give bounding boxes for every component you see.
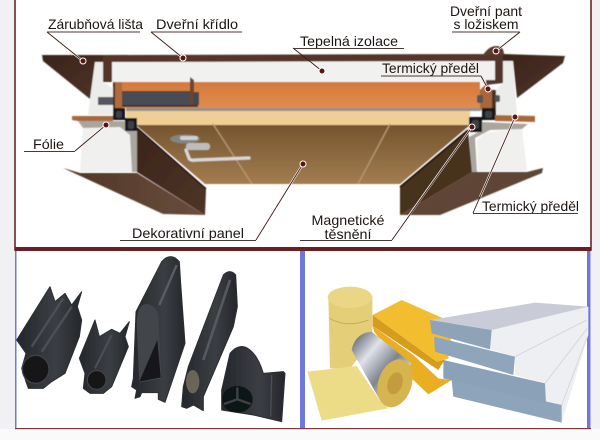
label: Magnetické těsnění: Magnetické bbox=[312, 212, 385, 228]
leader lines and markers bbox=[65, 44, 515, 228]
orange insulation bbox=[122, 82, 480, 108]
left thermal break block bbox=[98, 77, 199, 110]
label: Zárubňová lišta: Zárubňová lišta bbox=[48, 16, 143, 32]
left upper frame bbox=[42, 55, 107, 99]
door handle bbox=[170, 134, 249, 160]
gray strip bbox=[126, 108, 481, 111]
rubber seals bbox=[113, 108, 495, 132]
label: Magnetické těsnění bbox=[300, 212, 392, 242]
label: Magnetické těsnění: těsnění bbox=[324, 226, 372, 242]
left lower frame front bbox=[63, 168, 205, 215]
panel: door cross-section bbox=[15, 0, 591, 251]
right thermal strip bbox=[495, 115, 535, 122]
foam board 3 bbox=[443, 360, 546, 403]
foam board 2 bbox=[434, 337, 515, 375]
seal profile 1 bbox=[17, 287, 82, 388]
label: Fólie bbox=[24, 136, 75, 152]
label: Tepelná izolace: Tepelná izolace bbox=[300, 33, 398, 49]
right upper frame bbox=[503, 54, 565, 98]
yellow mineral slabs bbox=[373, 300, 453, 394]
wood panel bbox=[136, 125, 470, 184]
door leaf foam bbox=[112, 61, 495, 83]
seal profile 4 bbox=[182, 272, 237, 411]
right gray profile bbox=[469, 122, 528, 172]
label: Fólie: Fólie bbox=[33, 136, 64, 152]
foam board 1 bbox=[430, 303, 588, 349]
panel: rubber seal profiles bbox=[15, 251, 300, 429]
right upper foam bbox=[493, 61, 517, 115]
label: Dveřní pant s ložiskem bbox=[450, 3, 522, 32]
seal profile 5 bbox=[222, 347, 285, 422]
right lower foam bbox=[477, 128, 527, 171]
hinge bbox=[483, 46, 504, 55]
foam boards white sides bbox=[490, 307, 588, 423]
door leaf top skin bbox=[103, 54, 503, 85]
left lower frame side bbox=[137, 129, 206, 215]
cream edge bbox=[126, 111, 470, 125]
seal profile 2 bbox=[79, 320, 129, 393]
glass wool mat bbox=[307, 366, 388, 421]
label: Termický předěl upper: Termický předěl bbox=[382, 60, 479, 76]
left gray profile bbox=[78, 121, 137, 172]
label: Dekorativní panel: Dekorativní panel bbox=[132, 225, 244, 241]
left thermal strip bbox=[72, 116, 113, 121]
seal profile 3 bbox=[132, 257, 185, 402]
divider band between photos bbox=[300, 251, 305, 429]
label: Dveřní pant s ložiskem: s ložiskem bbox=[454, 16, 518, 32]
left lower foam bbox=[80, 127, 132, 172]
right lower frame front bbox=[400, 168, 543, 215]
foil wrapped roll bbox=[352, 332, 418, 412]
label: Dveřní křídlo: Dveřní křídlo bbox=[156, 16, 238, 32]
left upper foam bbox=[88, 62, 113, 115]
upright glass wool roll bbox=[328, 287, 372, 368]
foam board 4 bbox=[452, 380, 562, 423]
panel: insulation materials bbox=[300, 251, 591, 429]
label: Dveřní pant s ložiskem: Dveřní pant bbox=[450, 3, 522, 19]
diagram: door assembly bbox=[42, 46, 565, 215]
label: Termický předěl lower: Termický předěl bbox=[482, 198, 579, 214]
right thermal break block bbox=[477, 83, 500, 115]
right lower frame side bbox=[400, 130, 472, 215]
